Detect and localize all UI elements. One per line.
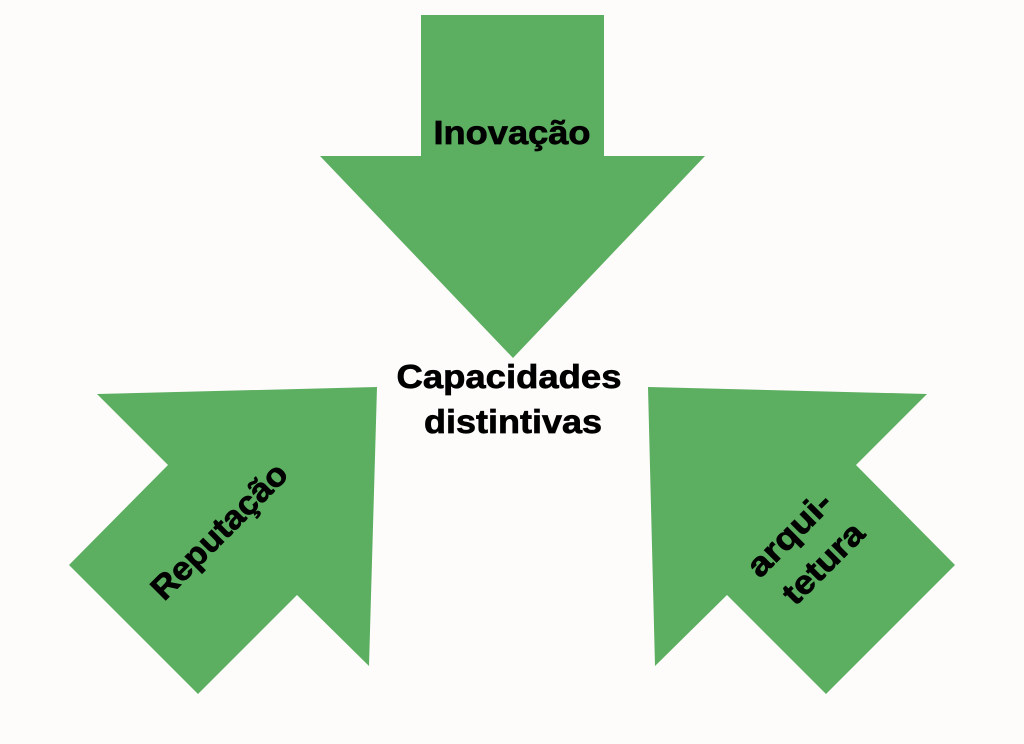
central heading: Capacidades distintivas: distintivas bbox=[424, 403, 602, 440]
arrow: arquitetura bbox=[648, 387, 955, 694]
label: Reputação: Reputação bbox=[143, 455, 295, 607]
label: arquitetura bbox=[739, 484, 872, 612]
central heading: Capacidades distintivas bbox=[396, 358, 622, 440]
arrow: Inovação bbox=[320, 15, 705, 358]
arrow: Reputação bbox=[69, 387, 377, 694]
label: arquitetura: tetura bbox=[774, 514, 872, 612]
label: Inovação: Inovação bbox=[434, 114, 590, 151]
label: arquitetura: arqui- bbox=[739, 484, 839, 584]
central heading: Capacidades distintivas: Capacidades bbox=[396, 358, 622, 395]
